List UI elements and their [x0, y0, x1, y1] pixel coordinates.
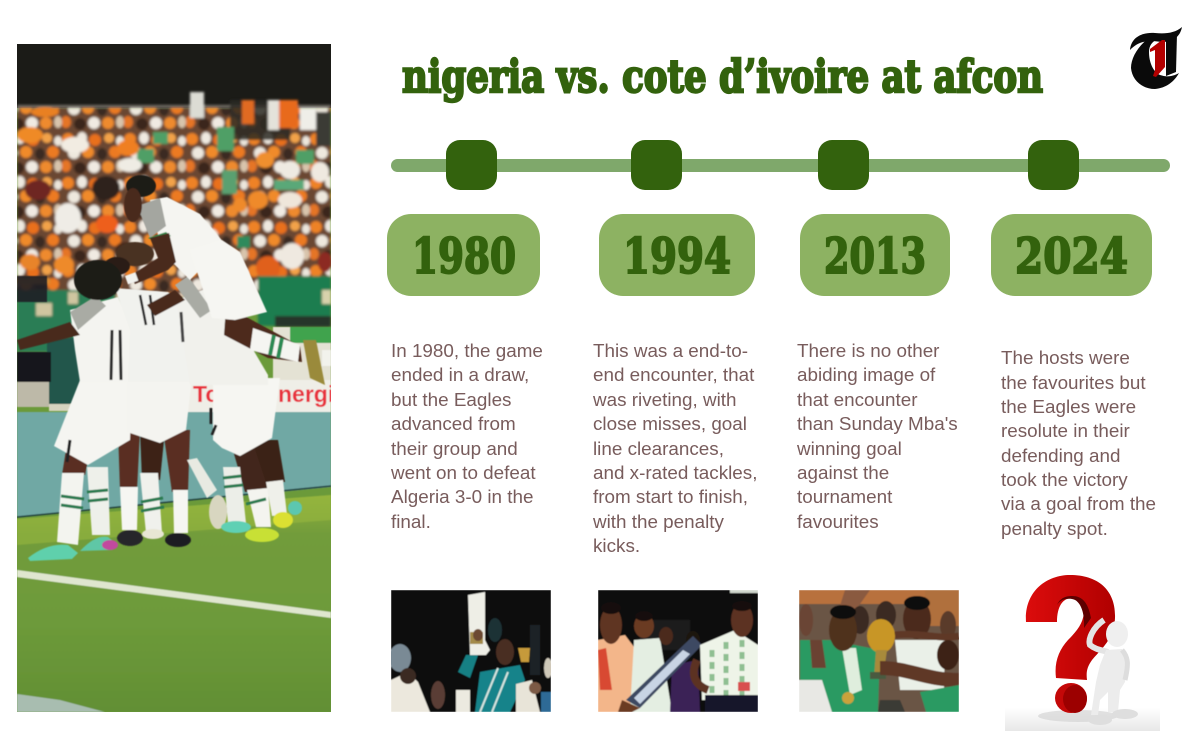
hair and heads — [116, 242, 154, 266]
text block: 1994: with the penalty — [592, 511, 725, 532]
text block: 1980: went on to defeat — [390, 462, 536, 483]
shirts — [70, 297, 132, 382]
marker: 2024 — [1028, 140, 1079, 190]
text block: 2013: There is no other — [797, 340, 939, 361]
text block: 1980: advanced from — [391, 413, 516, 434]
boots — [28, 545, 78, 561]
seats, lower — [17, 290, 87, 352]
grass pitch — [17, 495, 331, 712]
shorts — [54, 378, 133, 465]
text block: 2013: abiding image of — [797, 364, 936, 385]
marker: 2013 — [818, 140, 869, 190]
boot of top player — [303, 340, 325, 385]
text block: 2013: favourites — [797, 511, 879, 532]
text block: 1994: was riveting, with — [592, 389, 736, 410]
text block: 1980 — [390, 340, 543, 532]
year pill: 2024 — [991, 214, 1152, 296]
text block: 2024: the Eagles were — [1001, 396, 1136, 417]
text block: 1994: This was a end-to- — [593, 340, 748, 361]
text block: 1980: Algeria 3-0 in the — [391, 486, 533, 507]
text block: 1994: close misses, goal — [593, 413, 747, 434]
text block: 1994: end encounter, that — [593, 364, 755, 385]
teal track — [17, 412, 331, 517]
text block: 2013 — [796, 340, 958, 532]
timeline bar with markers — [391, 140, 1170, 190]
figure — [1090, 620, 1108, 652]
back legs — [118, 430, 140, 490]
photo: 1980 trophy lift — [389, 590, 552, 712]
text block: 2013: tournament — [797, 486, 893, 507]
marker: 1994 — [631, 140, 682, 190]
text block: 1980: In 1980, the game — [391, 340, 543, 361]
text block: 2013: that encounter — [797, 389, 917, 410]
text block: 2024: via a goal from the — [1001, 493, 1156, 514]
socks — [57, 473, 84, 545]
title: nigeria vs. cote d’ivoire at afcon — [402, 50, 1043, 103]
stadium wall and board: nergi — [278, 381, 334, 407]
stadium wall and board — [17, 276, 334, 712]
text block: 1980: ended in a draw, — [391, 364, 529, 385]
photo: 2013 trophy celebration — [799, 590, 959, 712]
photo: Nigeria players celebrating in the stadium — [17, 44, 334, 712]
green seat patches — [137, 149, 154, 163]
year pill: 2013: 2013 — [824, 227, 926, 285]
text block: 2024 — [1001, 347, 1156, 539]
year pill: 2013 — [800, 214, 950, 296]
icon: red question mark with thinking figure — [1005, 575, 1160, 731]
text block: 1980: final. — [391, 511, 431, 532]
text block: 2024: defending and — [1001, 445, 1120, 466]
text block: 2013: against the — [797, 462, 889, 483]
text block: 2024: resolute in their — [1001, 420, 1130, 441]
text block: 1980: their group and — [391, 438, 518, 459]
year pill: 1994 — [599, 214, 755, 296]
text block: 2024: penalty spot. — [1001, 518, 1108, 539]
stadium wall and board: To — [193, 381, 219, 407]
players group — [17, 175, 331, 561]
photo: 1994 trophy celebration — [598, 590, 758, 712]
text block: 1980: but the Eagles — [391, 389, 511, 410]
text block: 2024: The hosts were — [1001, 347, 1130, 368]
text block: 2024: the favourites but — [1001, 372, 1146, 393]
text block: 2013: winning goal — [796, 438, 902, 459]
logo: T1 blackletter mark — [1130, 27, 1182, 89]
year pill: 1980: 1980 — [412, 227, 516, 285]
text block: 1994 — [592, 340, 757, 556]
crowd colour clusters — [17, 127, 43, 143]
text block: 2013: than Sunday Mba's — [797, 413, 958, 434]
year pill: 1994: 1994 — [623, 227, 731, 285]
text block: 1994: line clearances, — [593, 438, 724, 459]
text block: 1994: and x-rated tackles, — [593, 462, 757, 483]
question mark — [1026, 575, 1115, 680]
year pill: 1980 — [387, 214, 540, 296]
text block: 1994: kicks. — [593, 535, 640, 556]
year pill: 2024: 2024 — [1015, 227, 1128, 285]
top player — [224, 316, 303, 363]
marker: 1980 — [446, 140, 497, 190]
arms — [17, 322, 80, 350]
text block: 1994: from start to finish, — [593, 486, 748, 507]
text block: 2024: took the victory — [1001, 469, 1128, 490]
